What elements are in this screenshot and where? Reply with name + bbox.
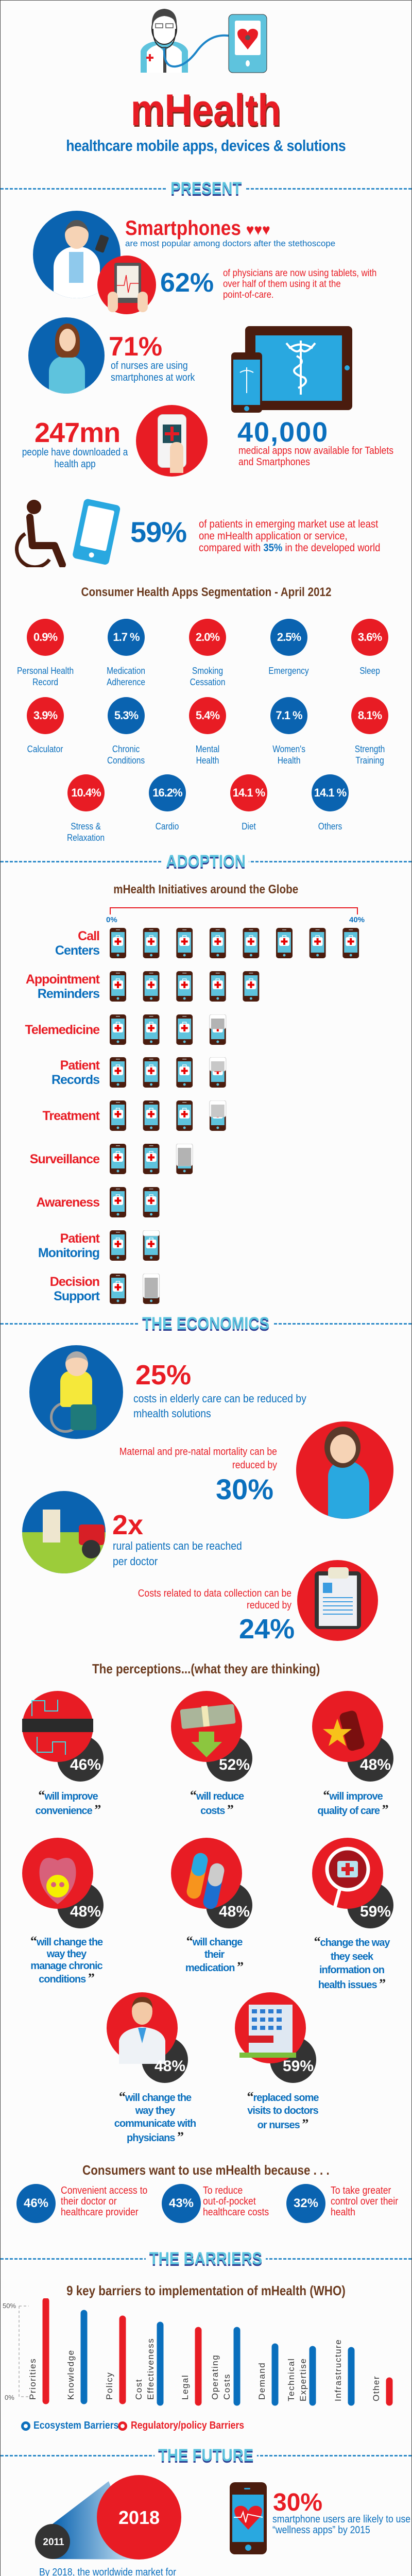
text: nurses using smartphones: [111, 360, 195, 383]
bar chart: barriers: Cost: [134, 2379, 144, 2400]
adoption row: Patient Records: [52, 1057, 227, 1088]
text: physicians using tablets: over half of them using it at the: [223, 279, 341, 290]
icon: phone with heart: [230, 2482, 267, 2555]
perception: seek health information 59%: information on: [319, 1964, 384, 1976]
text block: Smartphones headline: Smartphones ♥♥♥: [125, 217, 270, 240]
text: data collection costs: reduced by: [247, 1600, 291, 1611]
legend: Regulatory/policy Barriers: [131, 2420, 244, 2431]
perception: seek health information 59%: health issues ”: [318, 1976, 385, 1991]
segment: Stress & Relaxation: 10.4%: [71, 786, 101, 799]
bar chart: barriers: Operating: [210, 2354, 220, 2400]
text: people downloaded a health app: health app: [55, 459, 96, 470]
adoption row: Call Centers: Call: [78, 929, 99, 943]
segment: Mental Health: Health: [196, 755, 219, 766]
perception: communicate with physicians 48%: way they: [135, 2105, 175, 2116]
text: elderly care costs: costs in elderly care can be reduced by: [133, 1392, 306, 1405]
segment: Medication Adherence: 1.7 %: [113, 631, 140, 643]
bar chart: barriers: Other: [371, 2376, 381, 2401]
icon: wheelchair user and tablet: [15, 499, 121, 567]
segment: Sleep: [351, 619, 388, 676]
illustration: tablet with ECG (red circle): [97, 256, 156, 314]
text: medical apps available: medical apps now available for Tablets: [238, 445, 393, 456]
adoption row: Appointment Reminders: Reminders: [38, 987, 99, 1001]
text: wellness apps: smartphone users are likely to use: [272, 2514, 410, 2525]
section heading: PRESENT: [1, 179, 411, 198]
segment: Medication Adherence: Medication: [107, 666, 145, 676]
perception: manage chronic conditions 48%: way they: [47, 1948, 86, 1960]
segment: Chronic Conditions: 5.3%: [114, 709, 138, 722]
text: rural patients per doctor: per doctor: [113, 1555, 158, 1568]
segment: Women's Health: [270, 697, 307, 766]
text: people downloaded a health app: people have downloaded a: [22, 447, 128, 458]
perception: reduce costs 52%: 52%: [219, 1756, 250, 1773]
perception: change their medication 48%: their: [204, 1949, 224, 1960]
perception: manage chronic conditions 48%: conditions ”: [39, 1971, 94, 1986]
perception: replaced visits to doctors 59%: or nurses ”: [258, 2116, 308, 2131]
adoption row: Call Centers: [55, 928, 359, 958]
text: physicians using tablets: point-of-care.: [223, 290, 274, 300]
perception: change their medication 48%: 48%: [219, 1903, 250, 1920]
segment: Chronic Conditions: Chronic: [112, 744, 140, 754]
segment: Women's Health: 7.1 %: [276, 709, 302, 722]
segmentation row 2: [27, 697, 388, 766]
section heading: THE FUTURE: [1, 2448, 411, 2463]
segment: Sleep: Sleep: [359, 666, 380, 676]
text: nurses using smartphones: smartphones at work: [111, 372, 195, 383]
reason: 46% convenient access: [16, 2184, 150, 2225]
illustration: globes 2011 to 2018: [31, 2473, 186, 2564]
illustration: nurse (blue circle): [28, 317, 105, 394]
perception: replaced visits to doctors 59%: “replaced some: [247, 2089, 319, 2104]
bar chart: barriers: Knowledge: [66, 2349, 76, 2400]
adoption row: Telemedicine: Telemedicine: [25, 1023, 99, 1037]
adoption row: Awareness: [36, 1187, 160, 1217]
segment: Smoking Cessation: 2.0%: [196, 631, 219, 643]
illustration: rural hospital and tractor (blue circle): [22, 1491, 106, 1573]
perception: manage chronic conditions 48%: [22, 1837, 109, 1987]
segment: Mental Health: Mental: [196, 744, 219, 754]
segment: Strength Training: Strength: [355, 744, 385, 754]
perception: replaced visits to doctors 59%: visits to doctors: [247, 2105, 318, 2116]
segment: Emergency: 2.5%: [277, 631, 301, 643]
segment: Smoking Cessation: [189, 619, 226, 687]
segment: Personal Health Record: [17, 619, 74, 687]
segment: Calculator: 3.9%: [33, 709, 57, 722]
adoption row: Telemedicine: [25, 1014, 227, 1045]
perception: manage chronic conditions 48%: “will change the: [30, 1934, 102, 1948]
segment: Others: [312, 774, 349, 832]
heading: The perceptions: The perceptions...(what they are thinking): [92, 1661, 320, 1676]
reason: 46% convenient access: Convenient access to: [61, 2185, 147, 2196]
stat: 24%: 24%: [239, 1614, 295, 1645]
perception: change their medication 48%: [170, 1837, 258, 1987]
adoption row: Patient Monitoring: [1, 1230, 371, 1261]
adoption row: Patient Monitoring: Monitoring: [38, 1246, 99, 1260]
segment: Stress & Relaxation: [67, 774, 105, 843]
bar chart: barriers: Effectiveness: [146, 2338, 156, 2400]
adoption row: Surveillance: [30, 1144, 193, 1174]
section heading: THE ECONOMICS: [1, 1316, 411, 1331]
segment: Diet: [230, 774, 267, 832]
adoption row: Appointment Reminders: [26, 971, 260, 1002]
stat: 71%: 71%: [109, 332, 162, 362]
perception: seek health information 59%: 59%: [360, 1903, 391, 1920]
stat: 2x: 2x: [112, 1510, 143, 1540]
text: elderly care costs: mhealth solutions: [133, 1407, 211, 1420]
segment: Cardio: Cardio: [156, 821, 179, 832]
text: maternal mortality: [78, 1445, 277, 1472]
perception: communicate with physicians 48%: [106, 1992, 194, 2141]
heading: mHealth Initiatives around the Globe: mHealth Initiatives around the Globe: [114, 883, 298, 896]
segment: Others: 14.1 %: [314, 786, 346, 799]
segment: Sleep: 3.6%: [358, 631, 382, 643]
reason: 32% greater control: 32%: [294, 2196, 318, 2210]
subtitle: healthcare mobile apps, devices & solutions: [66, 137, 346, 155]
perception: reduce costs 52%: [170, 1690, 258, 1819]
text: maternal mortality: reduced by: [232, 1460, 277, 1471]
perception: reduce costs 52%: “will reduce: [190, 1788, 244, 1803]
adoption row: Call Centers: Centers: [55, 943, 99, 958]
adoption row: Appointment Reminders: Appointment: [26, 972, 99, 987]
heading: Consumers want to use mHealth because: Consumers want to use mHealth because . . .: [82, 2162, 330, 2178]
stat: 62%: 62%: [160, 268, 214, 298]
reason: 32% greater control: [286, 2184, 405, 2225]
text: nurses using smartphones: of nurses are using: [111, 360, 188, 371]
segment: Medication Adherence: [107, 619, 145, 687]
reason: 43% reduce out-of-pocket costs: 43%: [169, 2196, 194, 2210]
section heading: ADOPTION: ADOPTION: [166, 852, 246, 871]
text: wellness apps: “wellness apps” by 2015: [272, 2524, 370, 2536]
section heading: THE FUTURE: THE FUTURE: [158, 2446, 254, 2465]
bar chart: barriers: Priorities: [28, 2358, 38, 2400]
segment: Calculator: [27, 697, 64, 754]
stat: 30% wellness apps: 30%: [273, 2489, 322, 2516]
segment: Women's Health: Women's: [272, 744, 305, 754]
bar chart: barriers: 0%: [5, 2394, 14, 2401]
reason: 46% convenient access: their doctor or: [61, 2196, 117, 2207]
bar chart: barriers: Policy: [105, 2372, 114, 2400]
perception: communicate with physicians 48%: “will change the: [119, 2089, 191, 2104]
text: patients in emerging market: one mHealth application or service,: [199, 530, 348, 542]
segment: Strength Training: Training: [355, 755, 384, 766]
perception: improve quality of care 48%: quality of care ”: [317, 1802, 388, 1817]
perception: communicate with physicians 48%: physicians ”: [127, 2129, 183, 2144]
reason: 43% reduce out-of-pocket costs: out-of-pocket: [203, 2196, 256, 2207]
heading: 9 key barriers: 9 key barriers to implementation of mHealth (WHO): [66, 2283, 346, 2298]
section heading: THE BARRIERS: [1, 2251, 411, 2266]
text: medical apps available: [238, 445, 393, 468]
stat: 25%: 25%: [135, 1360, 191, 1391]
segment: Mental Health: 5.4%: [196, 709, 219, 722]
text: wellness apps: [272, 2514, 412, 2536]
illustration: doctor with smartphone (blue circle): [33, 211, 121, 298]
section heading: THE ECONOMICS: THE ECONOMICS: [143, 1314, 269, 1333]
segment: Personal Health Record: 0.9%: [33, 631, 57, 643]
text: physicians using tablets: [223, 268, 376, 300]
perception: improve convenience 46%: “will improve: [38, 1788, 98, 1803]
bar chart: barriers: Infrastructure: [333, 2339, 343, 2401]
perception: seek health information 59%: [312, 1837, 399, 1992]
segment: Smoking Cessation: Smoking: [192, 666, 223, 676]
segment: Personal Health Record: Personal Health: [17, 666, 74, 676]
adoption row: Decision Support: Decision: [50, 1275, 99, 1289]
perception: communicate with physicians 48%: 48%: [154, 2058, 185, 2075]
illustration: finger tapping health app (red circle): [136, 405, 208, 477]
perception: improve quality of care 48%: 48%: [360, 1756, 391, 1773]
bar chart: barriers: Demand: [257, 2362, 267, 2400]
perception: seek health information 59%: “change the way: [314, 1934, 389, 1949]
perception: replaced visits to doctors 59%: [234, 1992, 322, 2141]
text: elderly care costs: [133, 1391, 330, 1421]
reason: 46% convenient access: healthcare provider: [61, 2207, 139, 2218]
segment: Emergency: Emergency: [269, 666, 309, 676]
perception: seek health information 59%: they seek: [331, 1951, 373, 1962]
perception: improve quality of care 48%: [312, 1690, 399, 1819]
text: medical apps available: and Smartphones: [238, 456, 310, 468]
reason: 43% reduce out-of-pocket costs: To reduce: [203, 2185, 243, 2196]
text: rural patients per doctor: rural patients can be reached: [113, 1539, 242, 1552]
text: data collection costs: Costs related to data collection can be: [138, 1588, 291, 1599]
stat: 59%: 59%: [130, 516, 186, 548]
heading: Consumer Health Apps Segmentation: Consumer Health Apps Segmentation - April 2012: [81, 585, 331, 599]
perception: improve convenience 46%: convenience ”: [36, 1802, 100, 1817]
title: mHealth: [131, 86, 281, 135]
segment: Chronic Conditions: Conditions: [107, 755, 145, 766]
text: physicians using tablets: of physicians are now using tablets, with: [223, 268, 376, 279]
segment: Cardio: 16.2%: [152, 786, 182, 799]
adoption row: Treatment: Treatment: [43, 1109, 99, 1123]
text: most popular after stethoscope: are most popular among doctors after the stethoscope: [125, 239, 335, 248]
header icon: doctor with stethoscope and phone: [141, 9, 267, 73]
adoption row: Decision Support: Support: [54, 1289, 99, 1303]
bar chart: barriers: Expertise: [298, 2358, 308, 2401]
perception: improve convenience 46%: [22, 1690, 109, 1819]
bar chart: barriers: Technical: [286, 2358, 296, 2401]
perception: improve convenience 46%: 46%: [70, 1756, 101, 1773]
perception: change their medication 48%: “will change: [186, 1934, 242, 1948]
perception: replaced visits to doctors 59%: 59%: [283, 2058, 314, 2075]
text: data collection costs: [93, 1588, 291, 1612]
perception: reduce costs 52%: costs ”: [200, 1802, 233, 1817]
illustration: elderly woman in wheelchair (blue circle): [29, 1345, 123, 1439]
reason: 32% greater control: health: [331, 2207, 355, 2218]
perception: change their medication 48%: medication ”: [185, 1959, 243, 1974]
text: rural patients per doctor: [113, 1538, 260, 1569]
illustration: globes 2011 to 2018: 2011: [43, 2537, 64, 2548]
adoption row: Patient Records: Records: [52, 1073, 99, 1087]
scale bracket 0% - 40%: 0%: [106, 916, 117, 924]
segment: Cardio: [149, 774, 186, 832]
reason: 43% reduce out-of-pocket costs: [162, 2184, 280, 2225]
adoption row: Patient Records: Patient: [60, 1058, 99, 1073]
bar chart: barriers: Costs: [222, 2374, 232, 2400]
scale bracket 0% - 40%: [106, 907, 365, 924]
section heading: ADOPTION: [1, 852, 411, 871]
segment: Smoking Cessation: Cessation: [190, 677, 225, 687]
illustration: pregnant woman (red circle): [296, 1421, 393, 1519]
stat: 247mn: 247mn: [35, 417, 120, 448]
adoption row: Surveillance: Surveillance: [30, 1152, 99, 1166]
section heading: PRESENT: PRESENT: [170, 179, 242, 198]
segment: Diet: 14.1 %: [233, 786, 265, 799]
illustration: globes 2011 to 2018: 2018: [118, 2507, 160, 2528]
segment: Calculator: Calculator: [27, 744, 63, 754]
perception: communicate with physicians 48%: communicate with: [114, 2118, 196, 2129]
legend: [20, 2420, 247, 2432]
adoption row: Awareness: Awareness: [36, 1195, 99, 1210]
segment: Diet: Diet: [242, 821, 256, 832]
segment: Mental Health: [189, 697, 226, 766]
segmentation row 1: [17, 619, 388, 687]
segment: Women's Health: Health: [278, 755, 300, 766]
perception: improve quality of care 48%: “will improve: [323, 1788, 383, 1803]
bar chart: barriers: 50%: [3, 2302, 16, 2310]
segment: Chronic Conditions: [107, 697, 145, 766]
illustration: tablet and phone with caduceus: [231, 326, 352, 413]
segment: Strength Training: [351, 697, 388, 766]
text: patients in emerging market: [199, 518, 380, 554]
reason: 32% greater control: control over their: [331, 2196, 398, 2207]
reason: 32% greater control: To take greater: [331, 2185, 391, 2196]
section heading: THE BARRIERS: THE BARRIERS: [149, 2249, 263, 2268]
text: patients in emerging market: compared with 35% in the developed world: [199, 542, 380, 554]
reason: 43% reduce out-of-pocket costs: healthcare costs: [203, 2207, 269, 2218]
segment: Emergency: [269, 619, 309, 676]
illustration: clipboard (red circle): [297, 1560, 378, 1641]
stat: 30%: 30%: [216, 1473, 273, 1505]
adoption row: Treatment: [42, 1100, 227, 1131]
segment: Medication Adherence: Adherence: [107, 677, 145, 687]
text: patients in emerging market: of patients in emerging market use at least: [199, 518, 378, 530]
segment: Stress & Relaxation: Relaxation: [67, 833, 105, 843]
bar chart: barriers: [1, 2298, 411, 2409]
segment: Others: Others: [318, 821, 342, 832]
legend: Ecosystem Barriers: [33, 2420, 118, 2431]
segment: Strength Training: 8.1%: [358, 709, 382, 722]
adoption row: Decision Support: [1, 1274, 371, 1304]
reason: 46% convenient access: 46%: [24, 2196, 48, 2210]
perception: manage chronic conditions 48%: 48%: [70, 1903, 101, 1920]
adoption row: Patient Monitoring: Patient: [60, 1231, 99, 1246]
stat: 40,000: 40,000: [237, 417, 329, 448]
segment: Stress & Relaxation: Stress &: [71, 821, 101, 832]
segmentation row 3: [67, 774, 349, 843]
segment: Personal Health Record: Record: [32, 677, 58, 687]
perception: manage chronic conditions 48%: manage chronic: [30, 1960, 102, 1972]
text: maternal mortality: Maternal and pre-natal mortality can be: [119, 1446, 277, 1458]
scale bracket 0% - 40%: 40%: [349, 916, 365, 924]
text: people downloaded a health app: [22, 447, 128, 470]
bar chart: barriers: Legal: [180, 2375, 190, 2400]
